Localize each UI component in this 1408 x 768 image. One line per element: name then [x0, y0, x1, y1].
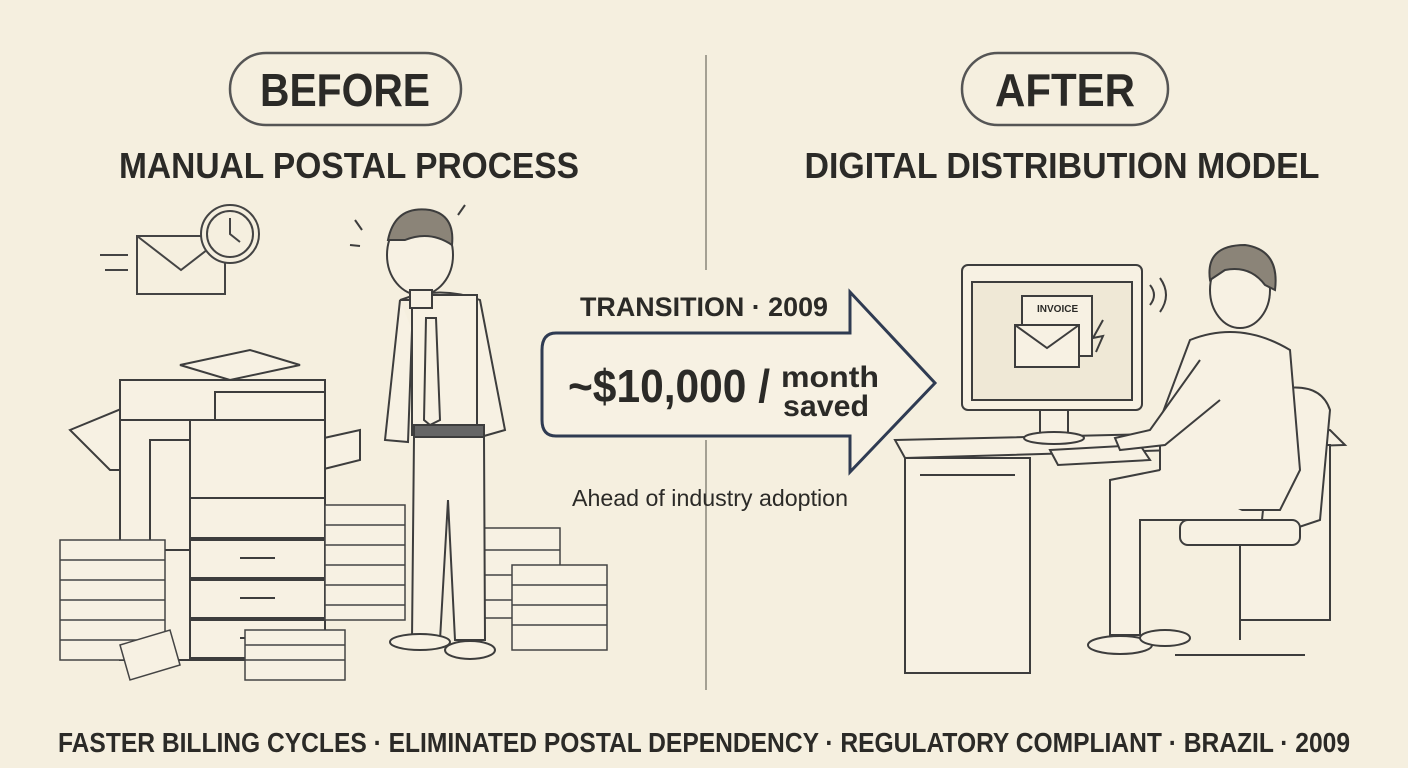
transition arrow: [542, 292, 935, 472]
illustration: seated man and chair: [1088, 245, 1330, 655]
savings figure: ~$10,000 /: [568, 360, 770, 412]
icon: envelope with clock: [100, 205, 259, 294]
savings figure: [568, 360, 879, 423]
savings figure: month: [781, 361, 879, 394]
after heading: [962, 53, 1168, 125]
illustration: stressed man: [350, 205, 505, 659]
after subtitle: DIGITAL DISTRIBUTION MODEL: [804, 145, 1320, 186]
caption: Ahead of industry adoption: [572, 485, 848, 511]
after heading: AFTER: [995, 64, 1135, 116]
divider: [705, 55, 707, 690]
before heading: BEFORE: [260, 64, 430, 116]
illustration: copier: [70, 350, 360, 660]
illustration: paper stacks: [60, 505, 607, 680]
before heading: [230, 53, 461, 125]
before subtitle: MANUAL POSTAL PROCESS: [119, 145, 579, 186]
illustration: desk with computer: [895, 265, 1345, 673]
arrow label: TRANSITION · 2009: [580, 292, 828, 322]
arrow shape: [542, 292, 935, 472]
text: INVOICE: [1037, 304, 1078, 315]
savings figure: saved: [783, 390, 869, 423]
